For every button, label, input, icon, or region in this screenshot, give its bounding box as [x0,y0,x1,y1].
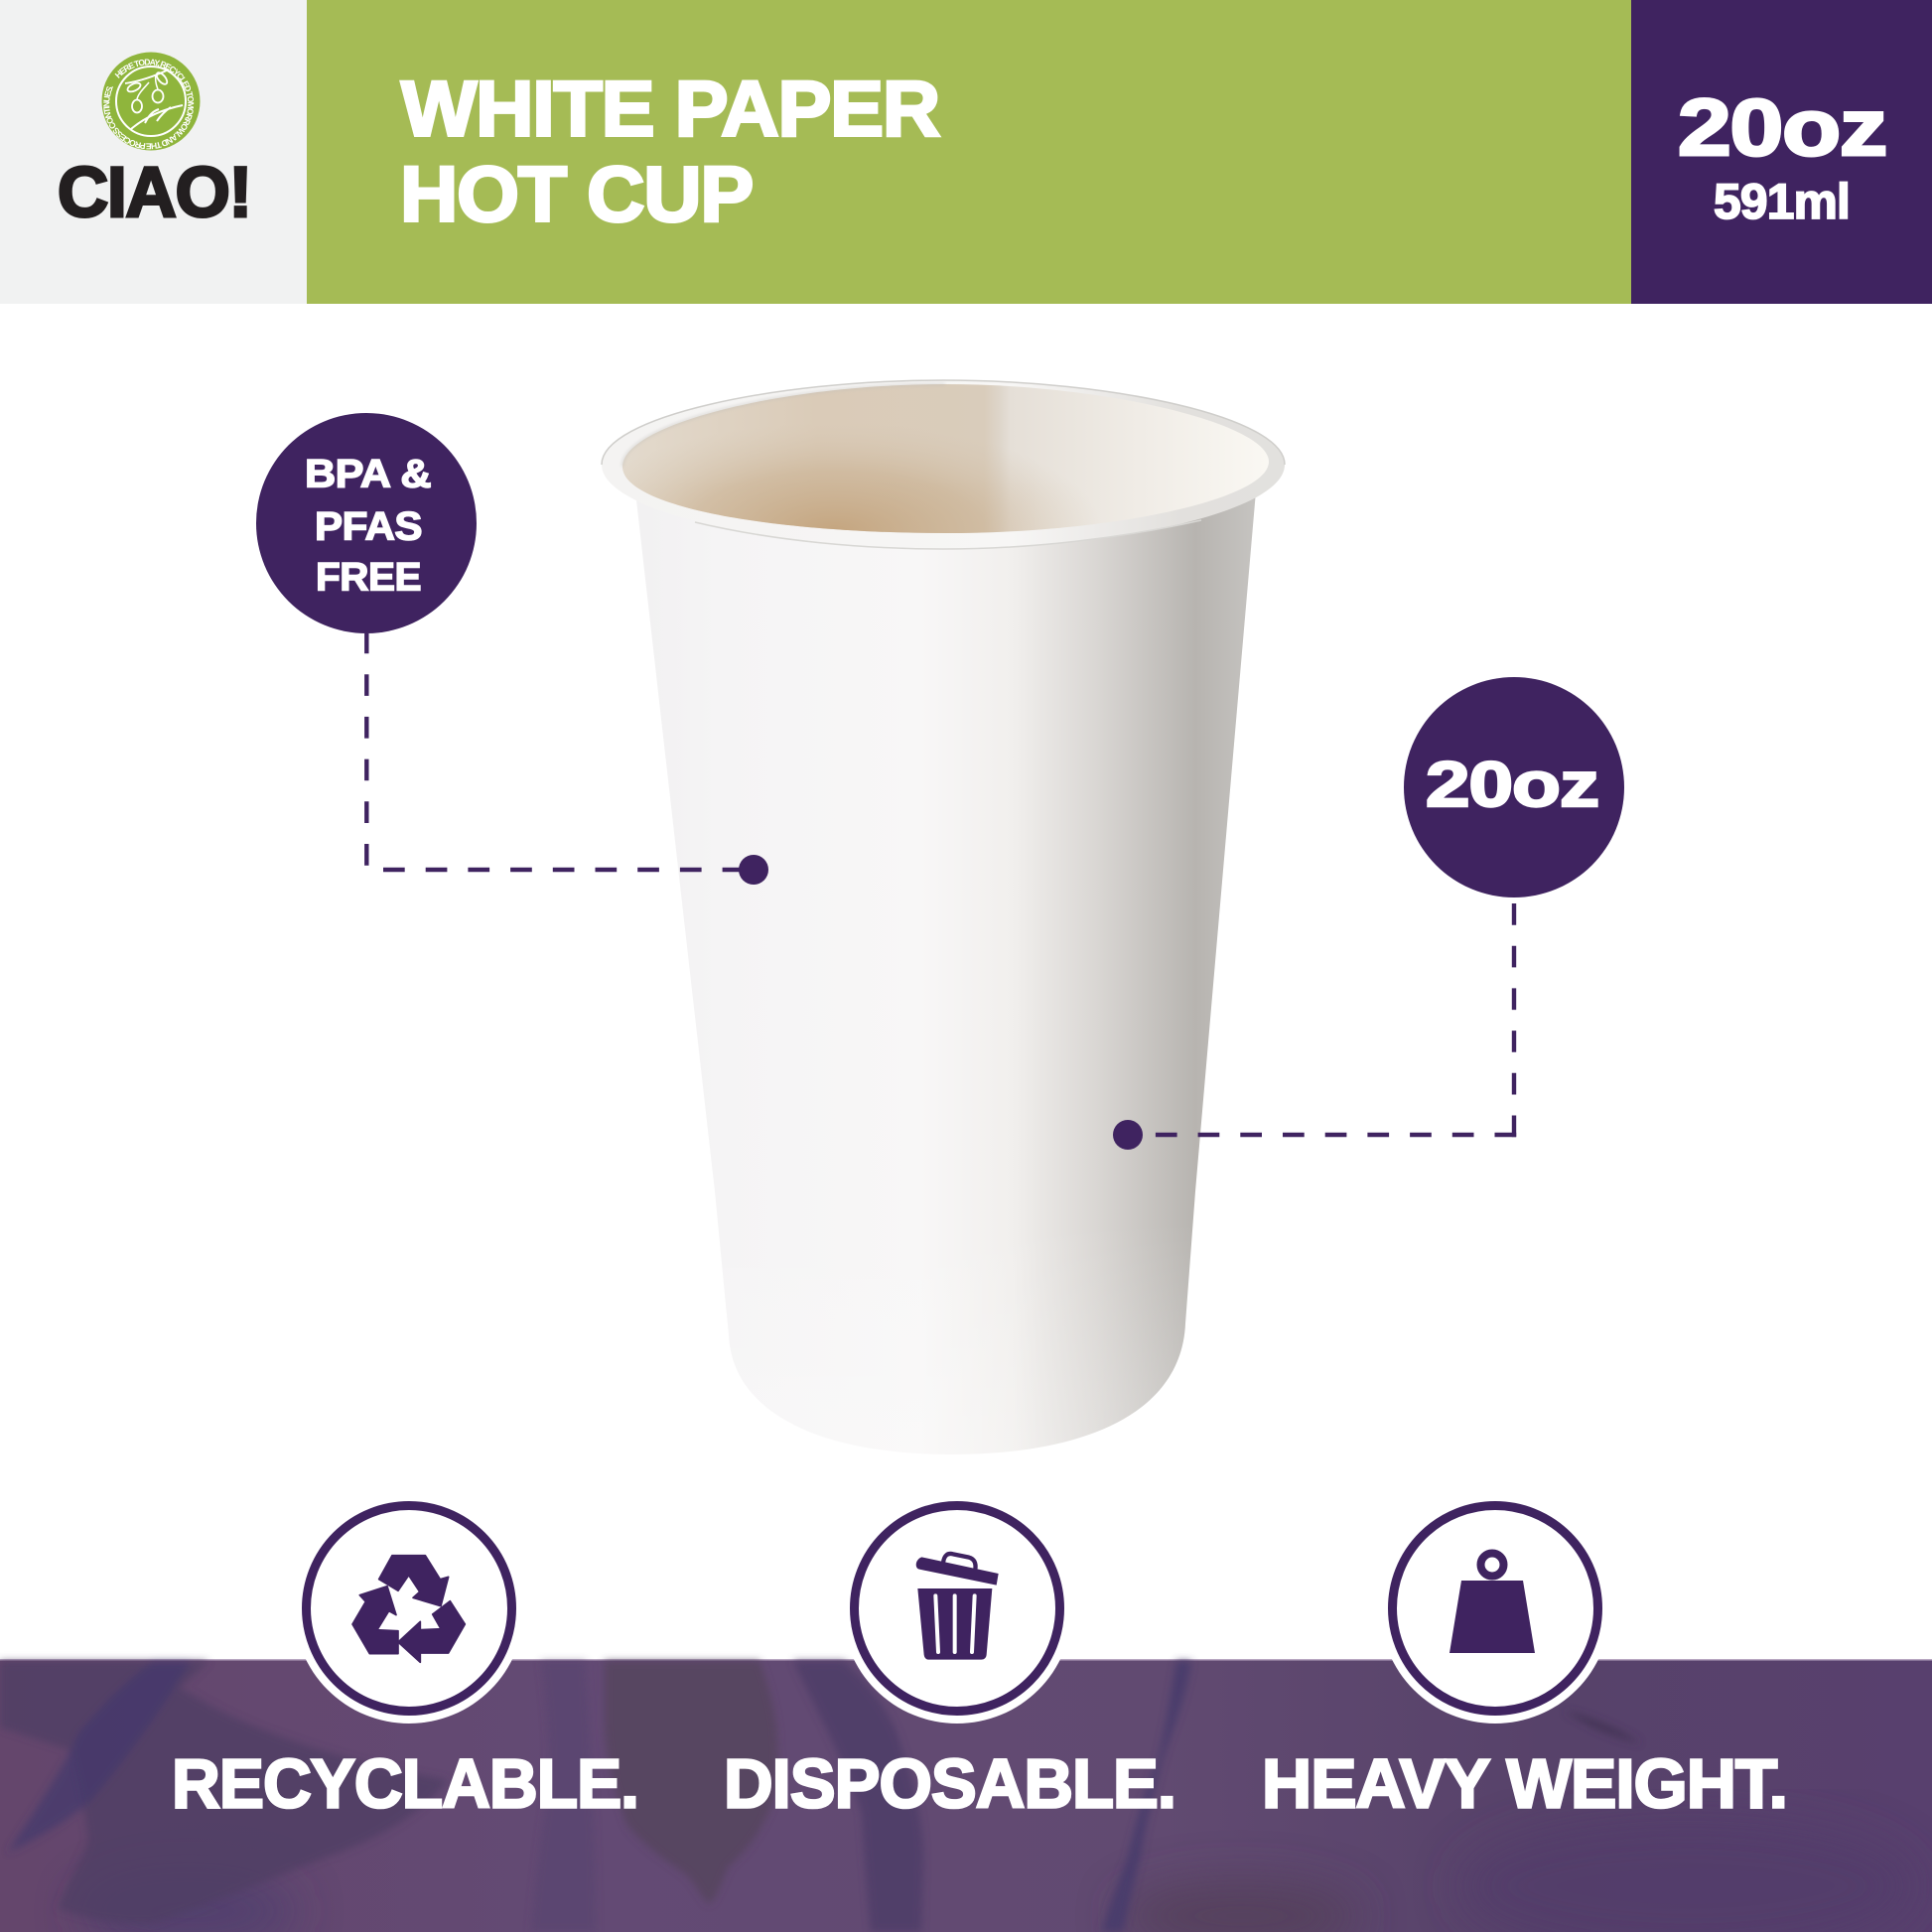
icon: round recycled-leaf badge: HERE TODAY, RECYCLED TOMORROW. AND THE PROCESS CONTINUES. [103,60,195,149]
icon: weight [1449,1553,1535,1653]
product: white paper cup [566,380,1285,1454]
bottom band with leaf photo background [0,1659,1932,1932]
feature: disposable [724,1493,1175,1823]
title: HOT CUP [400,149,753,238]
callout connector with dot [366,633,768,885]
label: HEAVY WEIGHT. [1262,1745,1787,1823]
callout connector with dot [1113,898,1516,1150]
brand wordmark: CIAO! [58,154,251,232]
callout text: FREE [316,556,421,600]
header: title panel [307,0,1631,304]
label: RECYCLABLE. [172,1745,638,1823]
feature: recyclable [172,1493,638,1823]
icon: recycling arrows [352,1556,465,1662]
feature: heavy weight [1262,1493,1787,1823]
size ounces: 20oz [1678,83,1886,173]
header: size panel [1631,0,1932,304]
size millilitres: 591ml [1714,174,1850,229]
callout text [305,453,431,600]
callout text: PFAS [315,504,422,548]
callout text: BPA & [305,453,431,496]
callout text: 20oz [1426,749,1598,820]
title: WHITE PAPER [401,64,939,153]
label: DISPOSABLE. [724,1745,1175,1823]
title [400,64,939,238]
callout: BPA and PFAS free [256,413,768,885]
icon: trash can [916,1554,999,1660]
callout: 20oz capacity [1113,677,1624,1150]
header: logo panel [0,0,307,304]
